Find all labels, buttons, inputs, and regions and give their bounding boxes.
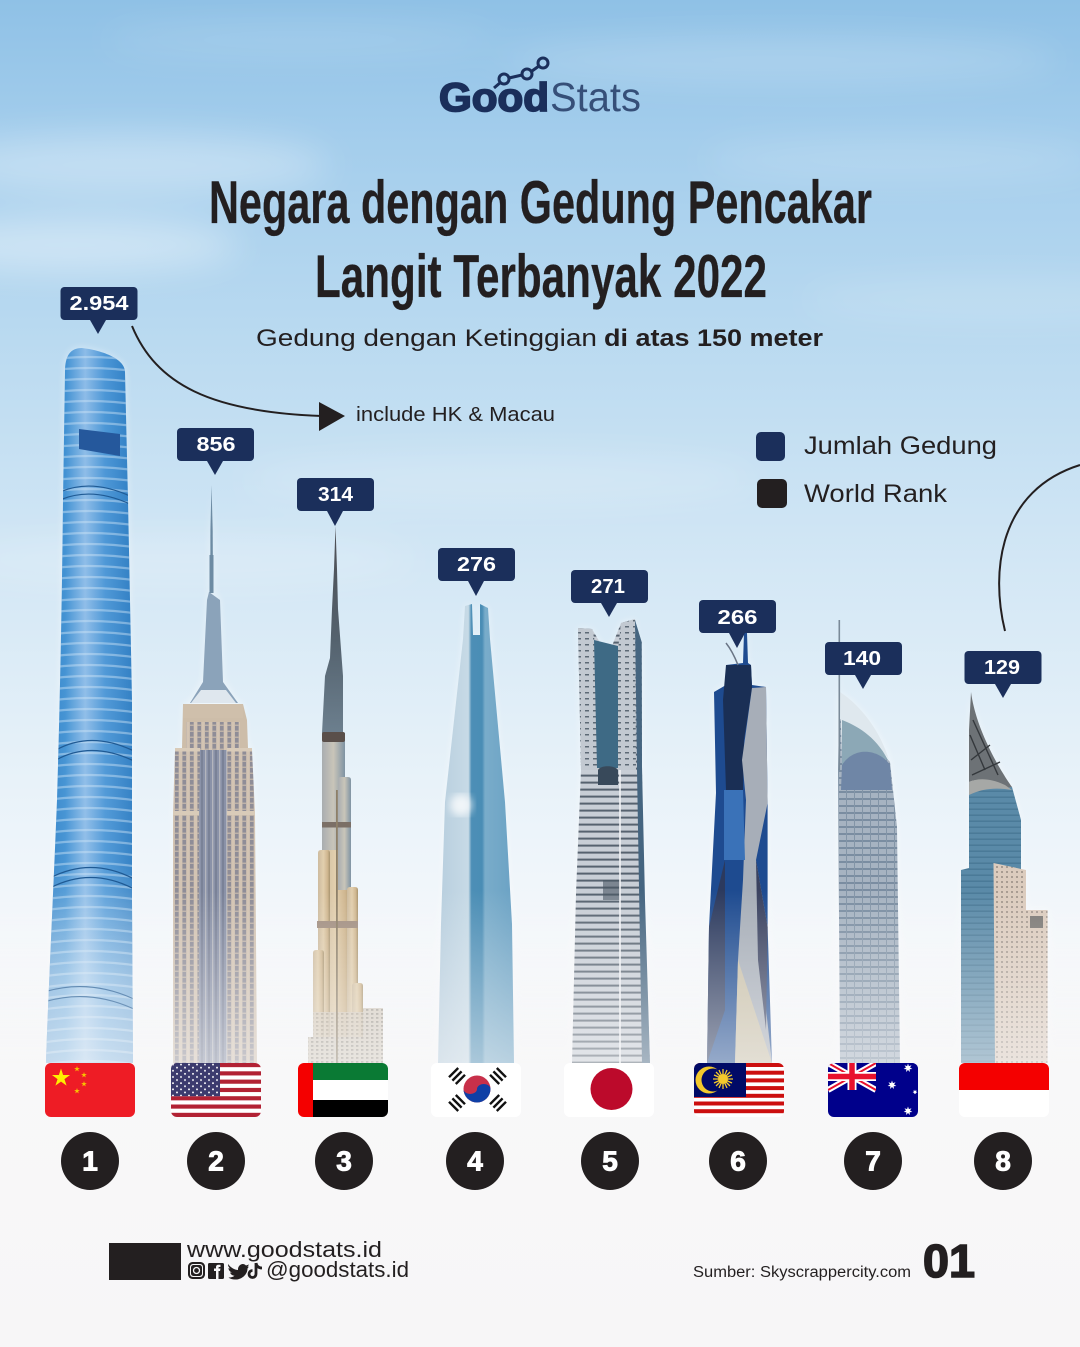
rank badge 2: 2 (208, 1146, 224, 1176)
flag: Indonesia (959, 1063, 1049, 1090)
rank badge 2 (187, 1132, 245, 1190)
icon: facebook (208, 1263, 224, 1279)
callout: 140: 140 (843, 648, 881, 670)
rank badge 3: 3 (336, 1146, 352, 1176)
callout: 276: 276 (457, 554, 496, 576)
flag: China (45, 1063, 135, 1117)
title: Langit Terbanyak 2022 (315, 243, 767, 310)
arc line to Indonesia (999, 465, 1080, 631)
icon: instagram (188, 1262, 205, 1279)
building 2: Empire State (173, 485, 257, 1063)
page number: 01 (923, 1235, 975, 1287)
building 1: Shanghai Tower (44, 348, 136, 1063)
footer black block (109, 1243, 181, 1280)
icon: tiktok (249, 1263, 262, 1278)
subtitle: di atas 150 meter (604, 325, 823, 352)
rank badge 5 (581, 1132, 639, 1190)
callout: 2.954 (60, 287, 138, 334)
rank badge 6 (709, 1132, 767, 1190)
flag: Australia (828, 1063, 918, 1117)
rank badge 1 (61, 1132, 119, 1190)
rank badge 4 (446, 1132, 504, 1190)
logo: GoodStats: Stats (550, 74, 641, 120)
subtitle: Gedung dengan Ketinggian (256, 325, 597, 352)
rank badge 8: 8 (995, 1146, 1011, 1176)
rank badge 4: 4 (467, 1146, 483, 1176)
callout: 271 (571, 570, 648, 617)
rank badge 8 (974, 1132, 1032, 1190)
callout: 129: 129 (984, 657, 1020, 679)
building 3: Burj Khalifa (308, 526, 383, 1063)
note: include HK and Macau: include HK & Macau (356, 404, 555, 426)
callout: 2.954: 2.954 (70, 293, 130, 315)
logo: chart line icon (494, 58, 548, 88)
rank badge 6: 6 (730, 1146, 746, 1176)
subtitle (256, 325, 823, 352)
source: Sumber: Skyscrappercity.com (693, 1264, 911, 1281)
building 4: Lotte World Tower (438, 604, 514, 1063)
callout: 129 (964, 651, 1042, 698)
rank badge 7 (844, 1132, 902, 1190)
building 6: Merdeka 118 (707, 633, 772, 1063)
logo: GoodStats: Good (439, 76, 549, 120)
flag: Malaysia (694, 1063, 784, 1117)
building 8: BNI City tower (961, 692, 1048, 1063)
decorative fade (0, 890, 1080, 1063)
flag: Japan (590, 1068, 632, 1110)
callout: 314: 314 (318, 484, 354, 506)
callout: 856: 856 (196, 434, 236, 456)
building 5: Yokohama Landmark Tower (572, 619, 650, 1063)
logo: GoodStats (439, 58, 641, 120)
callout: 140 (825, 642, 902, 689)
rank badge 5: 5 (602, 1146, 618, 1176)
legend: world rank: World Rank (804, 480, 948, 508)
flag: UAE (298, 1063, 388, 1117)
callout: 271: 271 (591, 576, 625, 598)
callout: 276 (438, 548, 515, 596)
icon: twitter (228, 1264, 249, 1280)
legend (756, 432, 997, 508)
footer social icons (188, 1262, 262, 1280)
callout: 314 (297, 478, 374, 526)
arrow to HK note (132, 326, 345, 431)
flag: United States (171, 1063, 261, 1117)
callout: 266: 266 (718, 607, 758, 629)
callout: 856 (177, 428, 254, 475)
title (209, 169, 872, 310)
rank badge 3 (315, 1132, 373, 1190)
legend: jumlah gedung: Jumlah Gedung (804, 432, 997, 460)
rank badge 7: 7 (865, 1146, 881, 1176)
legend: world rank (757, 479, 948, 508)
flag: South Korea (448, 1067, 507, 1112)
footer handle: @goodstats.id (266, 1257, 409, 1282)
callout: 266 (699, 600, 776, 648)
building 7: Q1 Tower (838, 620, 900, 1063)
footer website: www.goodstats.id (186, 1237, 382, 1262)
rank badge 1: 1 (82, 1146, 98, 1176)
